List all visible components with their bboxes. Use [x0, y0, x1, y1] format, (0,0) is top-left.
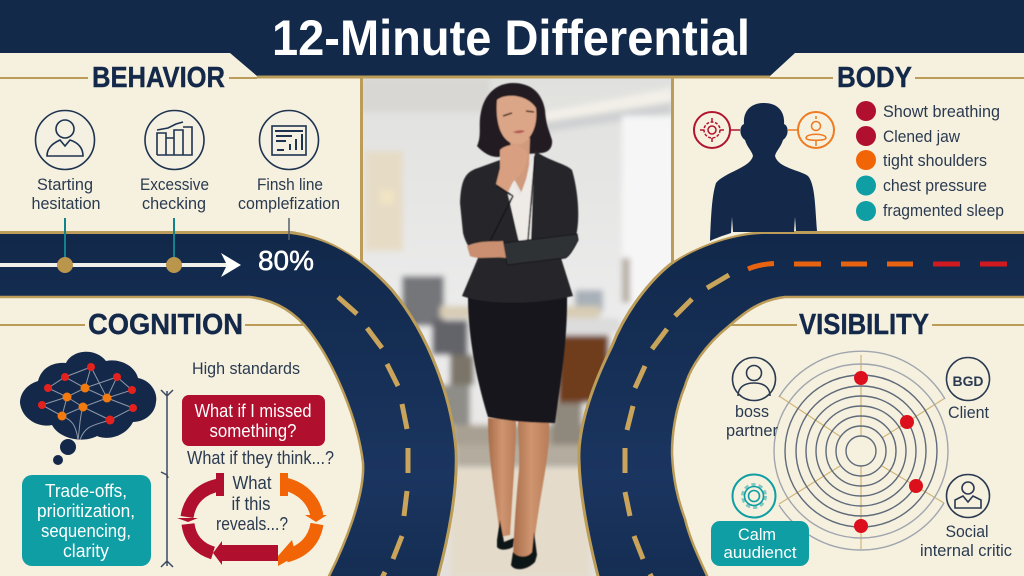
shoes [497, 520, 537, 569]
heading: behavior: BEHAVIOR [92, 62, 225, 94]
heading: visibility: VISIBILITY [799, 309, 929, 341]
label: 80 percent: 80% [258, 245, 314, 276]
label: starting hesitation: hesitation [32, 194, 100, 213]
symptom list: chest pressure [883, 176, 987, 195]
panel: visibility [672, 297, 1024, 576]
symptom list: fragmented sleep [883, 201, 1004, 220]
label: excessive checking: checking [142, 194, 206, 213]
icon: teal gear [732, 474, 776, 518]
callout: what if I missed something: something? [210, 421, 296, 441]
icon: client badge: BGD [952, 373, 984, 389]
callout: trade-offs: sequencing, [41, 521, 131, 541]
heading: body: BODY [837, 62, 912, 94]
progress arrow [0, 218, 314, 277]
callout: calm audience: auudienct [724, 543, 797, 562]
forearm sleeve [503, 234, 578, 265]
jacket [460, 150, 578, 303]
cycle arrows [177, 473, 327, 566]
callout: calm audience [711, 521, 809, 566]
photo: woman in a dark suit [460, 83, 578, 569]
label: high standards: High standards [192, 359, 300, 378]
radar chart [774, 351, 948, 550]
road: left curve [0, 232, 456, 576]
legs [488, 418, 549, 560]
title: 12-Minute Differential [272, 10, 750, 66]
panel: body [672, 53, 1024, 262]
face [497, 96, 536, 145]
callout: calm audience: Calm [738, 525, 776, 544]
shirt [510, 160, 533, 240]
hands [496, 145, 528, 192]
label: social internal critic: internal critic [920, 541, 1012, 560]
callout: what if I missed something: What if I missed [194, 401, 312, 421]
road dashes: right [625, 264, 1007, 576]
callout: what if I missed something [182, 395, 325, 446]
bracket [161, 390, 173, 567]
label: what if this reveals: reveals...? [216, 514, 288, 534]
label: starting hesitation: Starting [37, 175, 93, 194]
icon: client badge [946, 358, 990, 400]
callout: trade-offs: prioritization, [37, 501, 135, 521]
symptom list: Clened jaw [883, 127, 961, 146]
hair [477, 83, 552, 157]
icon: person [36, 110, 94, 170]
icon: brain thought cloud [20, 352, 156, 465]
road dashes: left [338, 297, 408, 576]
neck and chest [510, 138, 530, 195]
photo: office background [350, 70, 686, 576]
label: boss partner: boss [735, 402, 769, 421]
callout: trade-offs [22, 475, 151, 566]
symptom list: tight shoulders [883, 151, 987, 170]
silhouette [710, 103, 817, 241]
icon: red target [694, 112, 740, 148]
panel: behavior [0, 53, 770, 262]
label: social internal critic: Social [946, 522, 988, 541]
label: what if this reveals: if this [232, 494, 270, 514]
icon: social [946, 474, 990, 518]
label: what if they think: What if they think...? [187, 448, 334, 468]
callout: trade-offs: clarity [63, 541, 109, 561]
icon: report chart [260, 110, 318, 170]
label: finish line: complefization [238, 194, 340, 213]
label: what if this reveals: What [232, 473, 272, 493]
callout: trade-offs: Trade-offs, [45, 481, 127, 501]
symptom list [856, 101, 1004, 221]
panel: cognition [0, 297, 363, 576]
label: excessive checking: Excessive [140, 175, 209, 194]
symptom list: Showt breathing [883, 102, 1000, 121]
icon: rising bars [145, 110, 204, 170]
skirt [468, 292, 567, 423]
label: finish line: Finsh line [257, 175, 323, 194]
label: boss partner: partner [726, 421, 778, 440]
road: right curve [579, 232, 1024, 576]
heading: cognition: COGNITION [88, 309, 243, 341]
icon: boss [732, 358, 776, 400]
icon: orange figure [788, 112, 834, 148]
label: client: Client [948, 403, 989, 422]
